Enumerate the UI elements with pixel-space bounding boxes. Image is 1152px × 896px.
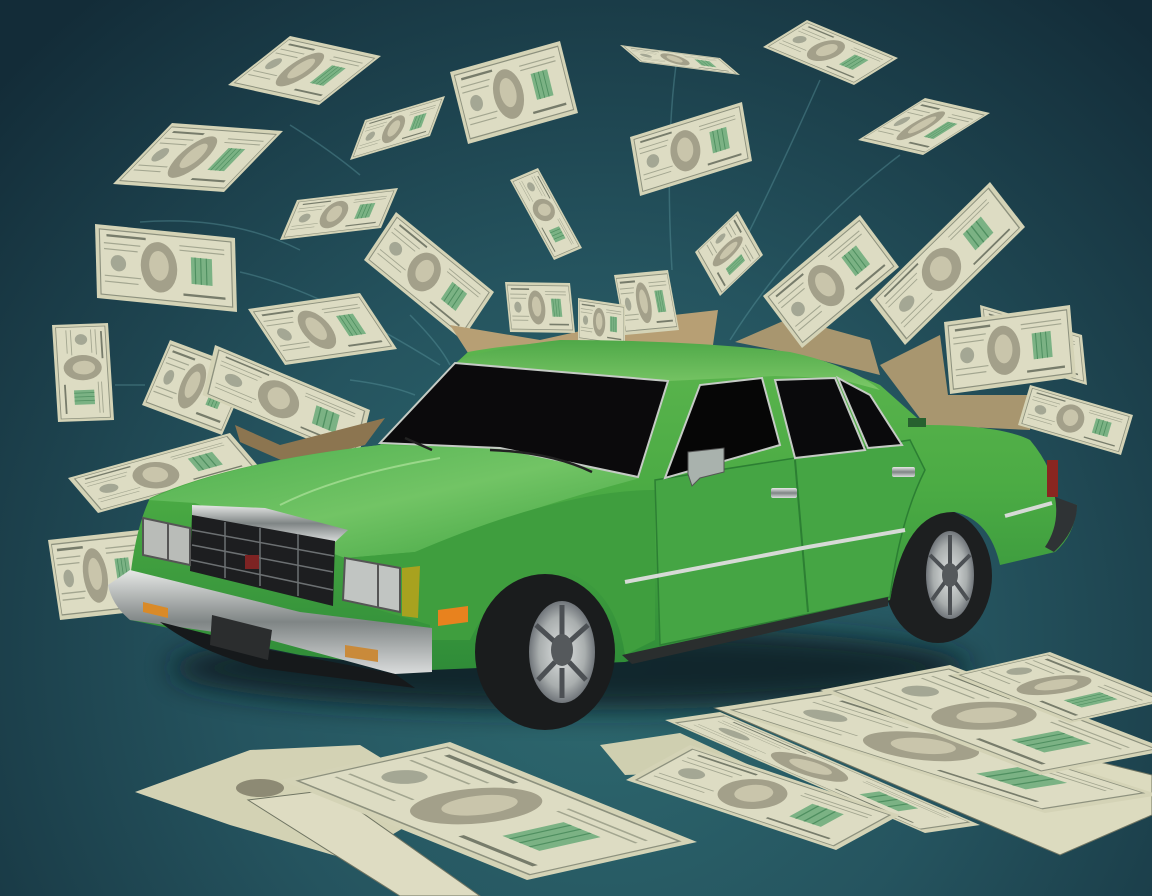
badge	[908, 418, 926, 427]
sill	[622, 597, 888, 664]
front bumper	[108, 570, 432, 674]
side chrome trim	[625, 503, 1052, 582]
money behind car, left side	[48, 340, 385, 620]
headlights	[143, 518, 420, 618]
side windows	[665, 378, 902, 478]
orange lights	[143, 602, 468, 662]
money behind car, right side	[880, 305, 1133, 455]
under bumper	[160, 622, 415, 688]
door divider	[795, 460, 808, 612]
door panels	[655, 440, 925, 645]
tail light	[1047, 460, 1058, 497]
wipers	[405, 438, 592, 472]
banknote pile: bottom left	[135, 742, 697, 896]
car body	[130, 341, 1077, 670]
motion streaks	[115, 65, 900, 395]
license plate	[210, 615, 272, 660]
door handles	[771, 467, 915, 498]
hood	[148, 445, 640, 558]
rear bumper	[1045, 497, 1077, 552]
flying banknotes: middle group	[52, 182, 1025, 422]
flying banknotes: upper group	[113, 20, 990, 296]
front wheel	[475, 574, 615, 730]
grille	[190, 505, 348, 606]
car shadow	[170, 626, 970, 710]
front fender	[345, 490, 655, 655]
roof	[455, 340, 880, 390]
car	[108, 340, 1077, 730]
rear wheel	[884, 509, 992, 643]
hood crease	[280, 458, 440, 505]
banknote pile: bottom right	[600, 652, 1152, 855]
windshield	[380, 363, 668, 477]
mirror	[688, 448, 724, 486]
